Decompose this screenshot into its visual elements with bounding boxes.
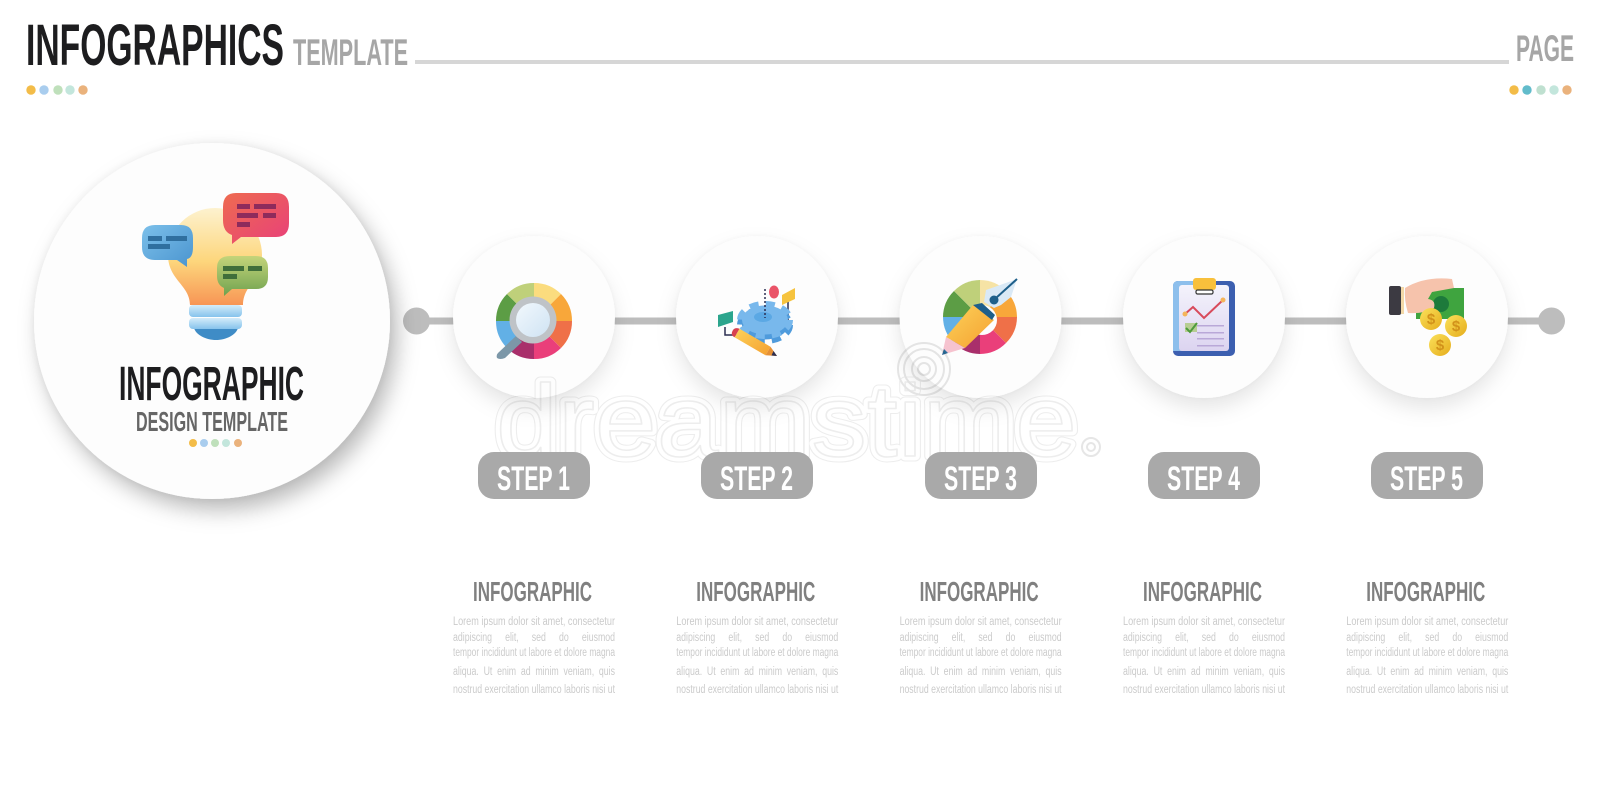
step 3 text: Lorem ipsum dolor sit amet, consectetur <box>900 616 1062 628</box>
step 4 text: tempor incididunt ut labore et dolore magna <box>1123 647 1285 659</box>
icon: hand with money and coins: $ <box>1452 318 1461 335</box>
icon: hand with money and coins <box>1389 278 1467 356</box>
step 1 text <box>453 576 616 696</box>
step 5 text: Lorem ipsum dolor sit amet, consectetur <box>1346 616 1508 628</box>
step 4 text: INFOGRAPHIC <box>1143 576 1262 607</box>
step 3 text: adipiscing elit, sed do eiusmod <box>900 632 1062 644</box>
panel: step 4 circle <box>1123 236 1285 398</box>
main circle heading: INFOGRAPHIC <box>119 358 304 411</box>
timeline connector <box>403 308 1565 334</box>
step 4 text: adipiscing elit, sed do eiusmod <box>1123 632 1285 644</box>
step 5 pill <box>1371 452 1483 499</box>
step 2 text: adipiscing elit, sed do eiusmod <box>676 632 838 644</box>
step 5 text: tempor incididunt ut labore et dolore magna <box>1346 647 1509 659</box>
step 1 pill: STEP 1 <box>497 460 570 498</box>
main circle dots <box>189 439 242 447</box>
step 1 text: tempor incididunt ut labore et dolore magna <box>453 647 615 659</box>
panel: step 2 circle <box>676 236 838 398</box>
icon: colour wheel with pen and pencil <box>942 279 1017 355</box>
step 5 text: nostrud exercitation ullamco laboris nisi ut <box>1346 684 1509 696</box>
step 1 text: INFOGRAPHIC <box>473 576 592 607</box>
step 5 pill: STEP 5 <box>1390 460 1463 498</box>
step 1 text: nostrud exercitation ullamco laboris nisi ut <box>453 684 616 696</box>
step 4 text: Lorem ipsum dolor sit amet, consectetur <box>1123 616 1285 628</box>
step 2 text: aliqua. Ut enim ad minim veniam, quis <box>676 666 838 678</box>
step 3 pill: STEP 3 <box>944 460 1017 498</box>
step 5 text: adipiscing elit, sed do eiusmod <box>1346 632 1508 644</box>
panel: main circle <box>34 143 390 499</box>
step 2 pill <box>701 452 813 499</box>
page title: INFOGRAPHICS <box>26 13 284 78</box>
step 5 text: INFOGRAPHIC <box>1366 576 1485 607</box>
step 4 pill <box>1148 452 1260 499</box>
step 4 text <box>1123 576 1286 696</box>
step 4 pill: STEP 4 <box>1167 460 1240 498</box>
step 3 text <box>900 576 1062 696</box>
step 2 text: Lorem ipsum dolor sit amet, consectetur <box>676 616 838 628</box>
step 2 pill: STEP 2 <box>720 460 793 498</box>
step 5 text: aliqua. Ut enim ad minim veniam, quis <box>1346 666 1508 678</box>
step 3 text: INFOGRAPHIC <box>920 576 1039 607</box>
step 3 pill <box>925 452 1037 499</box>
page title: TEMPLATE <box>293 32 408 73</box>
step 2 text: nostrud exercitation ullamco laboris nisi ut <box>676 684 839 696</box>
main circle subheading: DESIGN TEMPLATE <box>136 406 288 437</box>
step 1 text: Lorem ipsum dolor sit amet, consectetur <box>453 616 615 628</box>
icon: light bulb with speech bubbles <box>142 193 289 340</box>
step 1 text: aliqua. Ut enim ad minim veniam, quis <box>453 666 615 678</box>
header rule <box>415 60 1509 64</box>
step 4 text: nostrud exercitation ullamco laboris nisi ut <box>1123 684 1286 696</box>
watermark: dreamstime <box>496 364 1077 478</box>
watermark: dreamstime <box>496 364 1077 478</box>
header dots left <box>26 85 88 95</box>
watermark: dreamstime <box>496 364 1077 478</box>
header dots right <box>1509 85 1572 95</box>
step 1 pill <box>478 452 590 499</box>
panel: step 5 circle <box>1346 236 1508 398</box>
step 4 text: aliqua. Ut enim ad minim veniam, quis <box>1123 666 1285 678</box>
icon: colour wheel with magnifier <box>496 283 572 359</box>
step 2 text: INFOGRAPHIC <box>696 576 815 607</box>
icon: hand with money and coins: $ <box>1427 311 1436 328</box>
panel: step 1 circle <box>453 236 615 398</box>
step 1 text: adipiscing elit, sed do eiusmod <box>453 632 615 644</box>
step 3 text: aliqua. Ut enim ad minim veniam, quis <box>900 666 1062 678</box>
step 2 text: tempor incididunt ut labore et dolore magna <box>676 647 839 659</box>
step 2 text <box>676 576 839 696</box>
icon: hand with money and coins: $ <box>1436 337 1445 354</box>
step 5 text <box>1346 576 1509 696</box>
icon: clipboard with chart <box>1173 278 1235 356</box>
icon: gear with pencil and flow nodes <box>718 286 795 356</box>
panel: step 3 circle <box>900 236 1062 398</box>
step 3 text: tempor incididunt ut labore et dolore magna <box>900 647 1062 659</box>
step 3 text: nostrud exercitation ullamco laboris nisi ut <box>900 684 1062 696</box>
